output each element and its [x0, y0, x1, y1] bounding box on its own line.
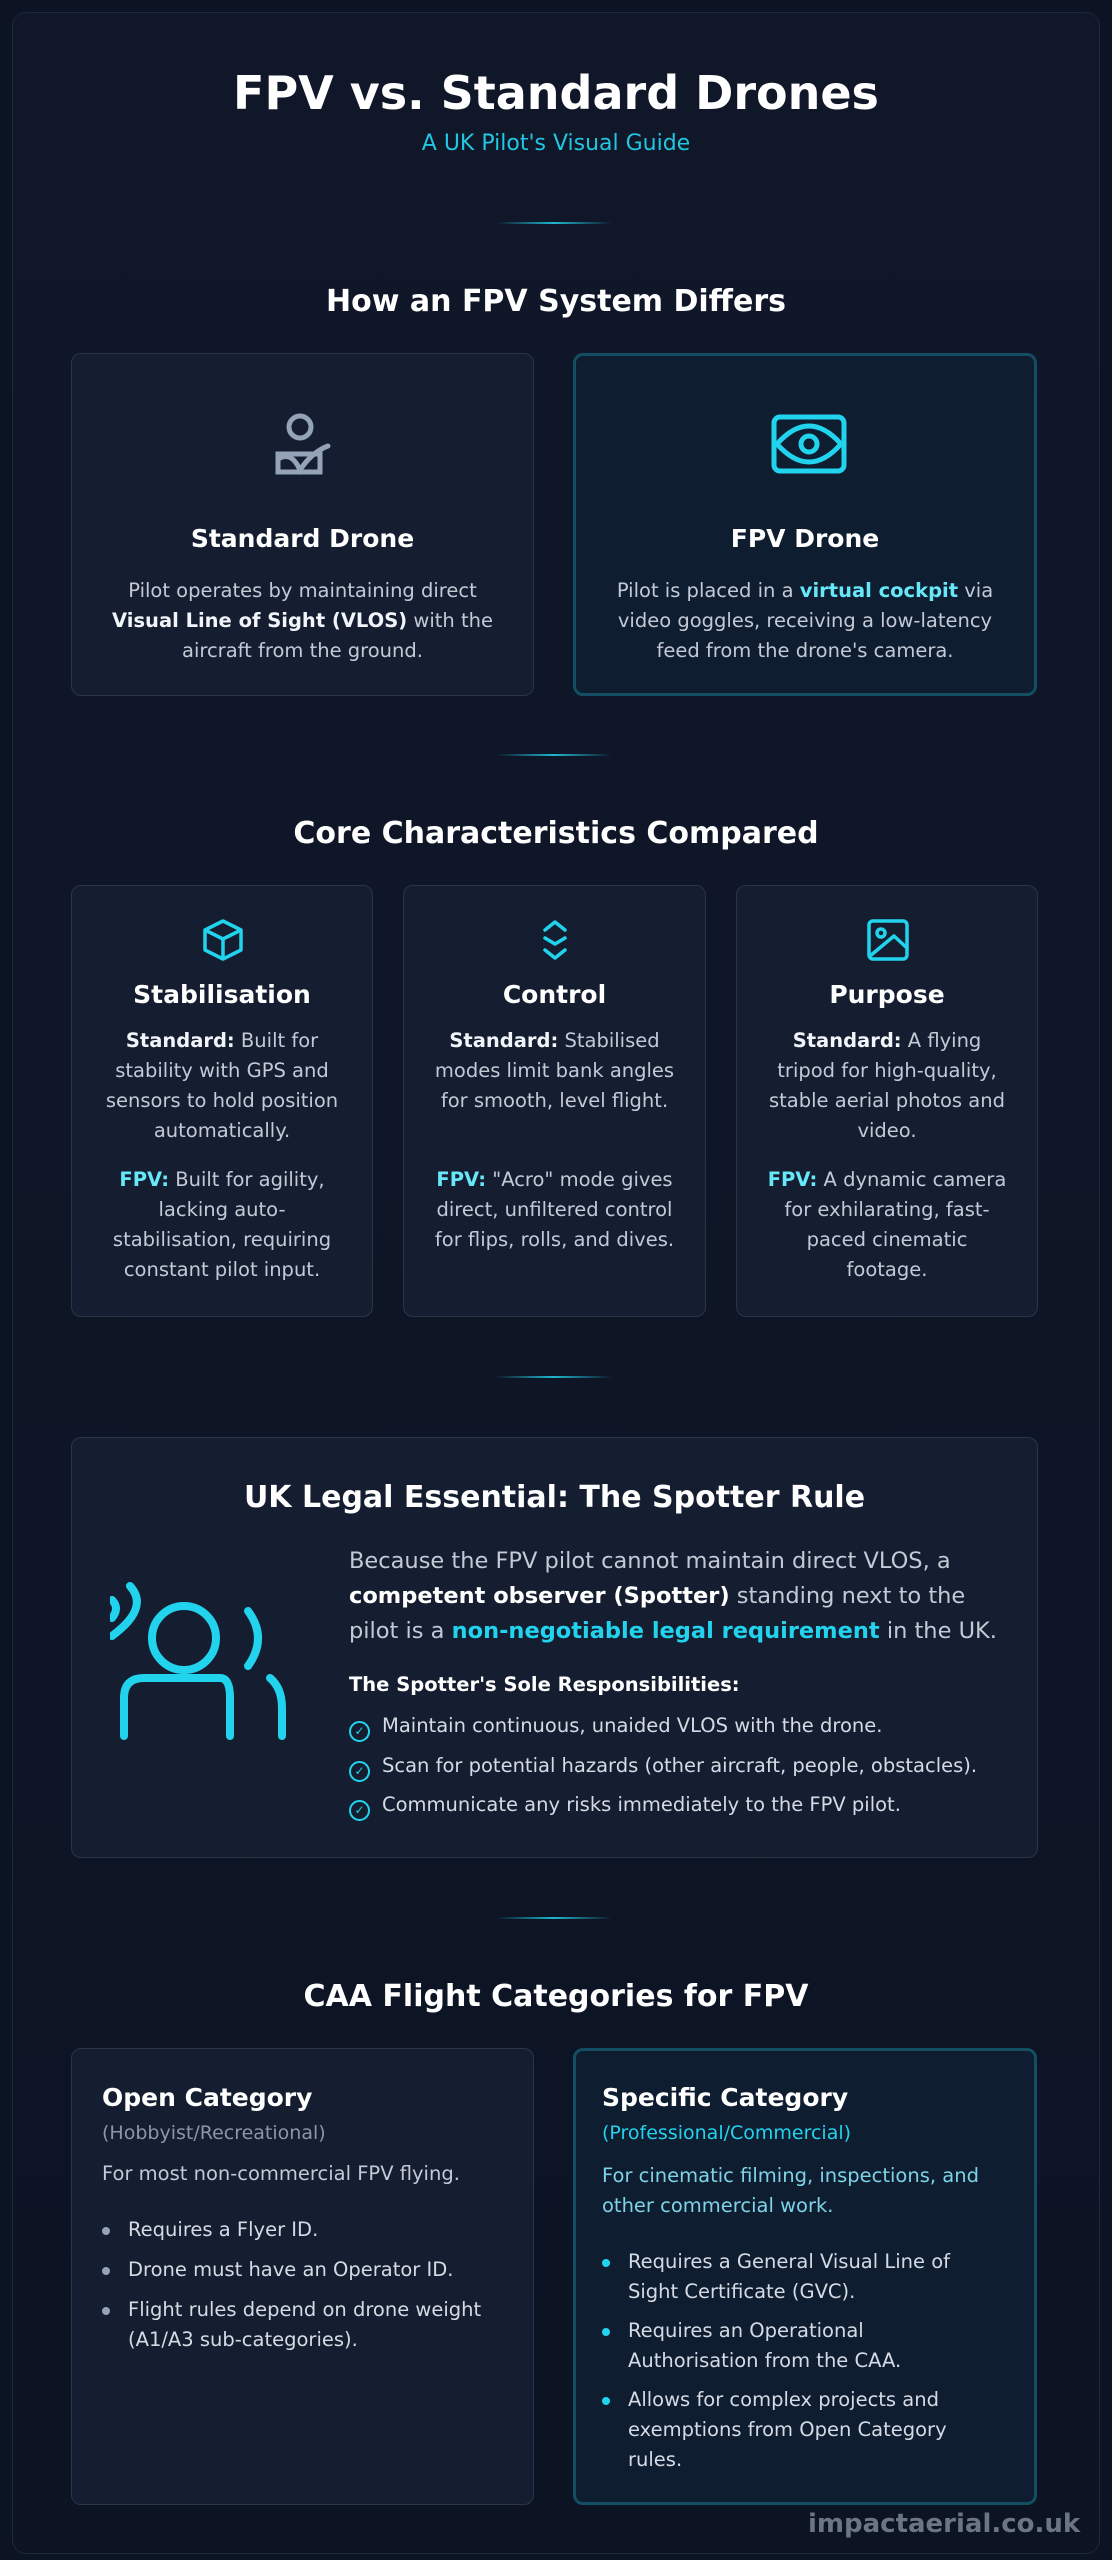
panel: open category: [71, 2048, 534, 2505]
text: Standard: A flying tripod for high-quality, stable aerial photos and video.: [769, 1029, 1005, 1142]
card text: Pilot operates by maintaining direct Visual Line of Sight (VLOS) with the aircraft from the ground.: [112, 579, 493, 662]
card title: FPV Drone: [731, 524, 879, 553]
panel: control: [403, 885, 706, 1317]
panel: specific category: [573, 2048, 1037, 2505]
icon: image: [867, 919, 909, 961]
bullets: Allows for complex projects and exemptions from Open Category rules.: [628, 2388, 947, 2471]
panel: standard drone: [71, 353, 534, 696]
icon: spotter: [110, 1582, 286, 1740]
checklist: ✓: [354, 1724, 365, 1738]
panel: stabilisation: [71, 885, 373, 1317]
card title: Control: [503, 980, 606, 1009]
text fpv: FPV: "Acro" mode gives direct, unfiltered control for flips, rolls, and dives.: [435, 1168, 674, 1251]
panel: purpose: [736, 885, 1038, 1317]
card title: Purpose: [829, 980, 945, 1009]
footer: website: impactaerial.co.uk: [808, 2509, 1080, 2539]
heading: Core Characteristics: Core Characteristics Compared: [293, 816, 819, 851]
text fpv: FPV: Built for agility, lacking auto-stabilisation, requiring constant pilot input.: [113, 1168, 331, 1281]
icon: pilot: [276, 414, 330, 475]
description: For cinematic filming, inspections, and other commercial work.: [602, 2164, 979, 2217]
checklist: [349, 1714, 977, 1821]
title: Open Category: [102, 2083, 312, 2112]
bullets: [102, 2218, 481, 2351]
description: For most non-commercial FPV flying.: [102, 2162, 460, 2185]
text: Standard: Built for stability with GPS and sensors to hold position automatically.: [106, 1029, 338, 1142]
bullets: [602, 2250, 950, 2471]
subtitle: (Hobbyist/Recreational): [102, 2122, 326, 2144]
text: Standard: Stabilised modes limit bank angles for smooth, level flight.: [435, 1029, 674, 1112]
bullets: Flight rules depend on drone weight (A1/A3 sub-categories).: [128, 2298, 481, 2351]
icon: goggles eye: [772, 414, 846, 474]
heading: How an FPV System Differs: How an FPV System Differs: [326, 284, 786, 319]
bullets: Drone must have an Operator ID.: [128, 2258, 453, 2281]
checklist: Scan for potential hazards (other aircraft, people, obstacles).: [382, 1754, 977, 1776]
text fpv: FPV: A dynamic camera for exhilarating, fast-paced cinematic footage.: [768, 1168, 1006, 1281]
bullets: Requires an Operational Authorisation from the CAA.: [628, 2319, 901, 2372]
title: Specific Category: [602, 2083, 848, 2112]
paragraph: Because the FPV pilot cannot maintain direct VLOS, a competent observer (Spotter) standing next to the pilot is a non-negotiable legal requirement in the UK.: [349, 1548, 997, 1644]
subtitle: A UK Pilot's Visual Guide: [422, 131, 690, 156]
checklist: Maintain continuous, unaided VLOS with the drone.: [382, 1714, 882, 1737]
checklist: ✓: [354, 1764, 365, 1778]
title: FPV vs. Standard Drones: [233, 66, 879, 120]
panel: spotter rule: [71, 1437, 1038, 1858]
heading: UK Legal Essential: The Spotter Rule: [244, 1480, 865, 1515]
checklist: ✓: [354, 1803, 365, 1817]
panel: FPV drone: [573, 353, 1037, 696]
subheading: The Spotter's Sole Responsibilities:: [349, 1673, 740, 1696]
subtitle: (Professional/Commercial): [602, 2122, 851, 2144]
card title: Standard Drone: [191, 524, 414, 553]
card text: Pilot is placed in a virtual cockpit via video goggles, receiving a low-latency feed from the drone's camera.: [617, 579, 993, 662]
bullets: Requires a Flyer ID.: [128, 2218, 318, 2241]
heading: CAA Flight Categories: CAA Flight Categories for FPV: [304, 1979, 808, 2014]
checklist: Communicate any risks immediately to the FPV pilot.: [382, 1793, 901, 1816]
icon: cube: [203, 919, 243, 961]
bullets: Requires a General Visual Line of Sight Certificate (GVC).: [628, 2250, 950, 2303]
icon: chevrons: [543, 920, 567, 960]
card title: Stabilisation: [133, 980, 311, 1009]
